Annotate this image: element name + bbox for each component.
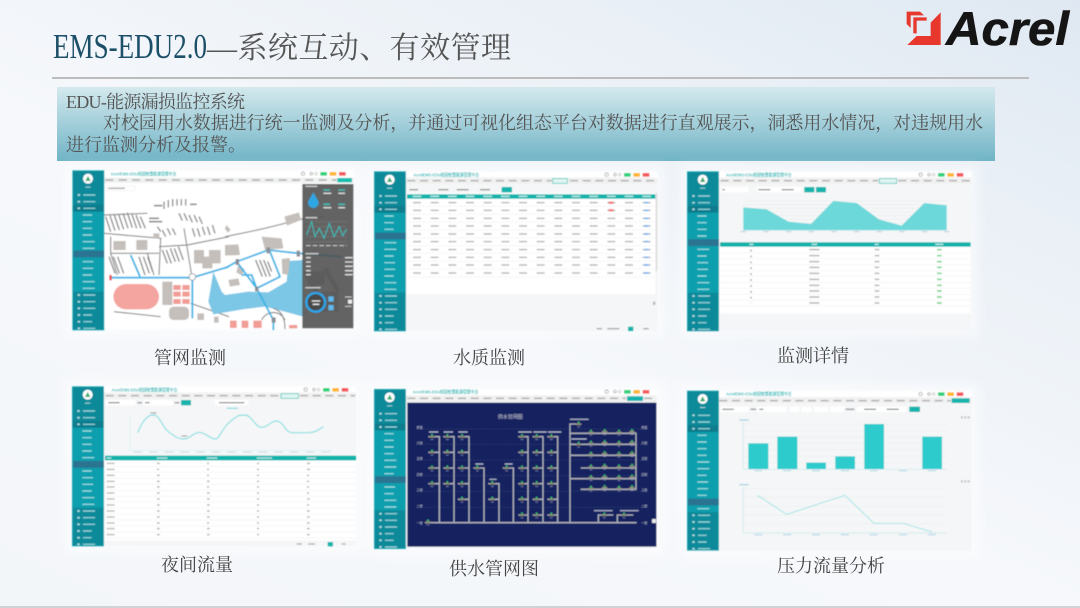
header rule	[52, 77, 1029, 79]
pipe network diagram: 一楼	[641, 520, 647, 525]
area chart	[741, 201, 949, 232]
bar chart	[739, 420, 947, 471]
panel: system description	[57, 87, 995, 161]
campus map: east	[208, 212, 342, 330]
pipe network diagram: 六楼	[417, 440, 423, 445]
pipe network diagram: 二楼	[417, 503, 423, 508]
data table	[720, 242, 971, 313]
data table	[105, 456, 356, 541]
panel: system description: 进行监测分析及报警。	[66, 134, 246, 155]
pipe network diagram: 四楼	[641, 471, 647, 476]
pipe network diagram: 屋面	[641, 425, 647, 430]
screenshot: water supply network diagram	[374, 389, 657, 549]
panel: system description: EDU-能源漏损监控系统	[66, 92, 245, 112]
pipe network diagram: 三楼	[641, 487, 647, 492]
screenshot: pressure and flow analysis: AcrelEMS-EDU校园智慧能源管理平台	[726, 391, 792, 398]
pipe network diagram: 四楼	[417, 471, 423, 476]
screenshot: water quality monitoring	[374, 171, 657, 331]
title: EMS-EDU2.0	[53, 27, 207, 66]
screenshot: pipe network monitoring	[73, 171, 353, 330]
pipe network diagram: 供水管网图	[498, 414, 523, 421]
dark stats panel	[302, 184, 353, 328]
pipe network diagram: 屋面	[417, 425, 423, 430]
screenshot: pressure and flow analysis	[687, 391, 972, 551]
screenshot: monitoring details	[687, 171, 972, 332]
night flow line chart	[130, 413, 332, 452]
data table	[407, 193, 655, 294]
soft glow behind screenshots	[66, 166, 978, 557]
line chart	[739, 485, 947, 535]
logo: Acrel: Acrel	[945, 2, 1070, 55]
screenshot: night flow	[72, 386, 356, 546]
pipe network diagram: 三楼	[417, 487, 423, 492]
panel: system description: 对校园用水数据进行统一监测及分析，并通过可视化组态平台对数据进行直观展示，洞悉用水情况，对违规用水	[103, 113, 983, 133]
pipe network diagram	[407, 403, 656, 547]
caption: monitoring details: 监测详情	[777, 346, 849, 366]
screenshot: water supply network diagram: AcrelEMS-EDU校园智慧能源管理平台	[413, 389, 479, 396]
caption: supply network diagram: 供水管网图	[449, 559, 539, 579]
caption: pipe network: 管网监测	[154, 348, 226, 368]
screenshot: pipe network monitoring: AcrelEMS-EDU校园智慧能源管理平台	[111, 171, 177, 178]
title: —系统互动、有效管理	[206, 32, 511, 65]
screenshot: monitoring details: AcrelEMS-EDU校园智慧能源管理平台	[726, 171, 792, 178]
pipe network diagram: 六楼	[641, 440, 647, 445]
caption: night flow: 夜间流量	[161, 555, 233, 575]
pipe network diagram: 五楼	[641, 456, 647, 461]
screenshot: night flow: AcrelEMS-EDU校园智慧能源管理平台	[112, 386, 178, 393]
pipe network diagram: 五楼	[417, 456, 423, 461]
caption: water quality: 水质监测	[453, 348, 525, 368]
pipe network diagram: 二楼	[641, 503, 647, 508]
title	[53, 27, 511, 66]
campus map: west	[104, 199, 229, 323]
caption: pressure flow analysis: 压力流量分析	[777, 556, 885, 576]
screenshot: water quality monitoring: AcrelEMS-EDU校园智慧能源管理平台	[413, 171, 479, 178]
pipe network diagram: 一楼	[417, 520, 423, 525]
